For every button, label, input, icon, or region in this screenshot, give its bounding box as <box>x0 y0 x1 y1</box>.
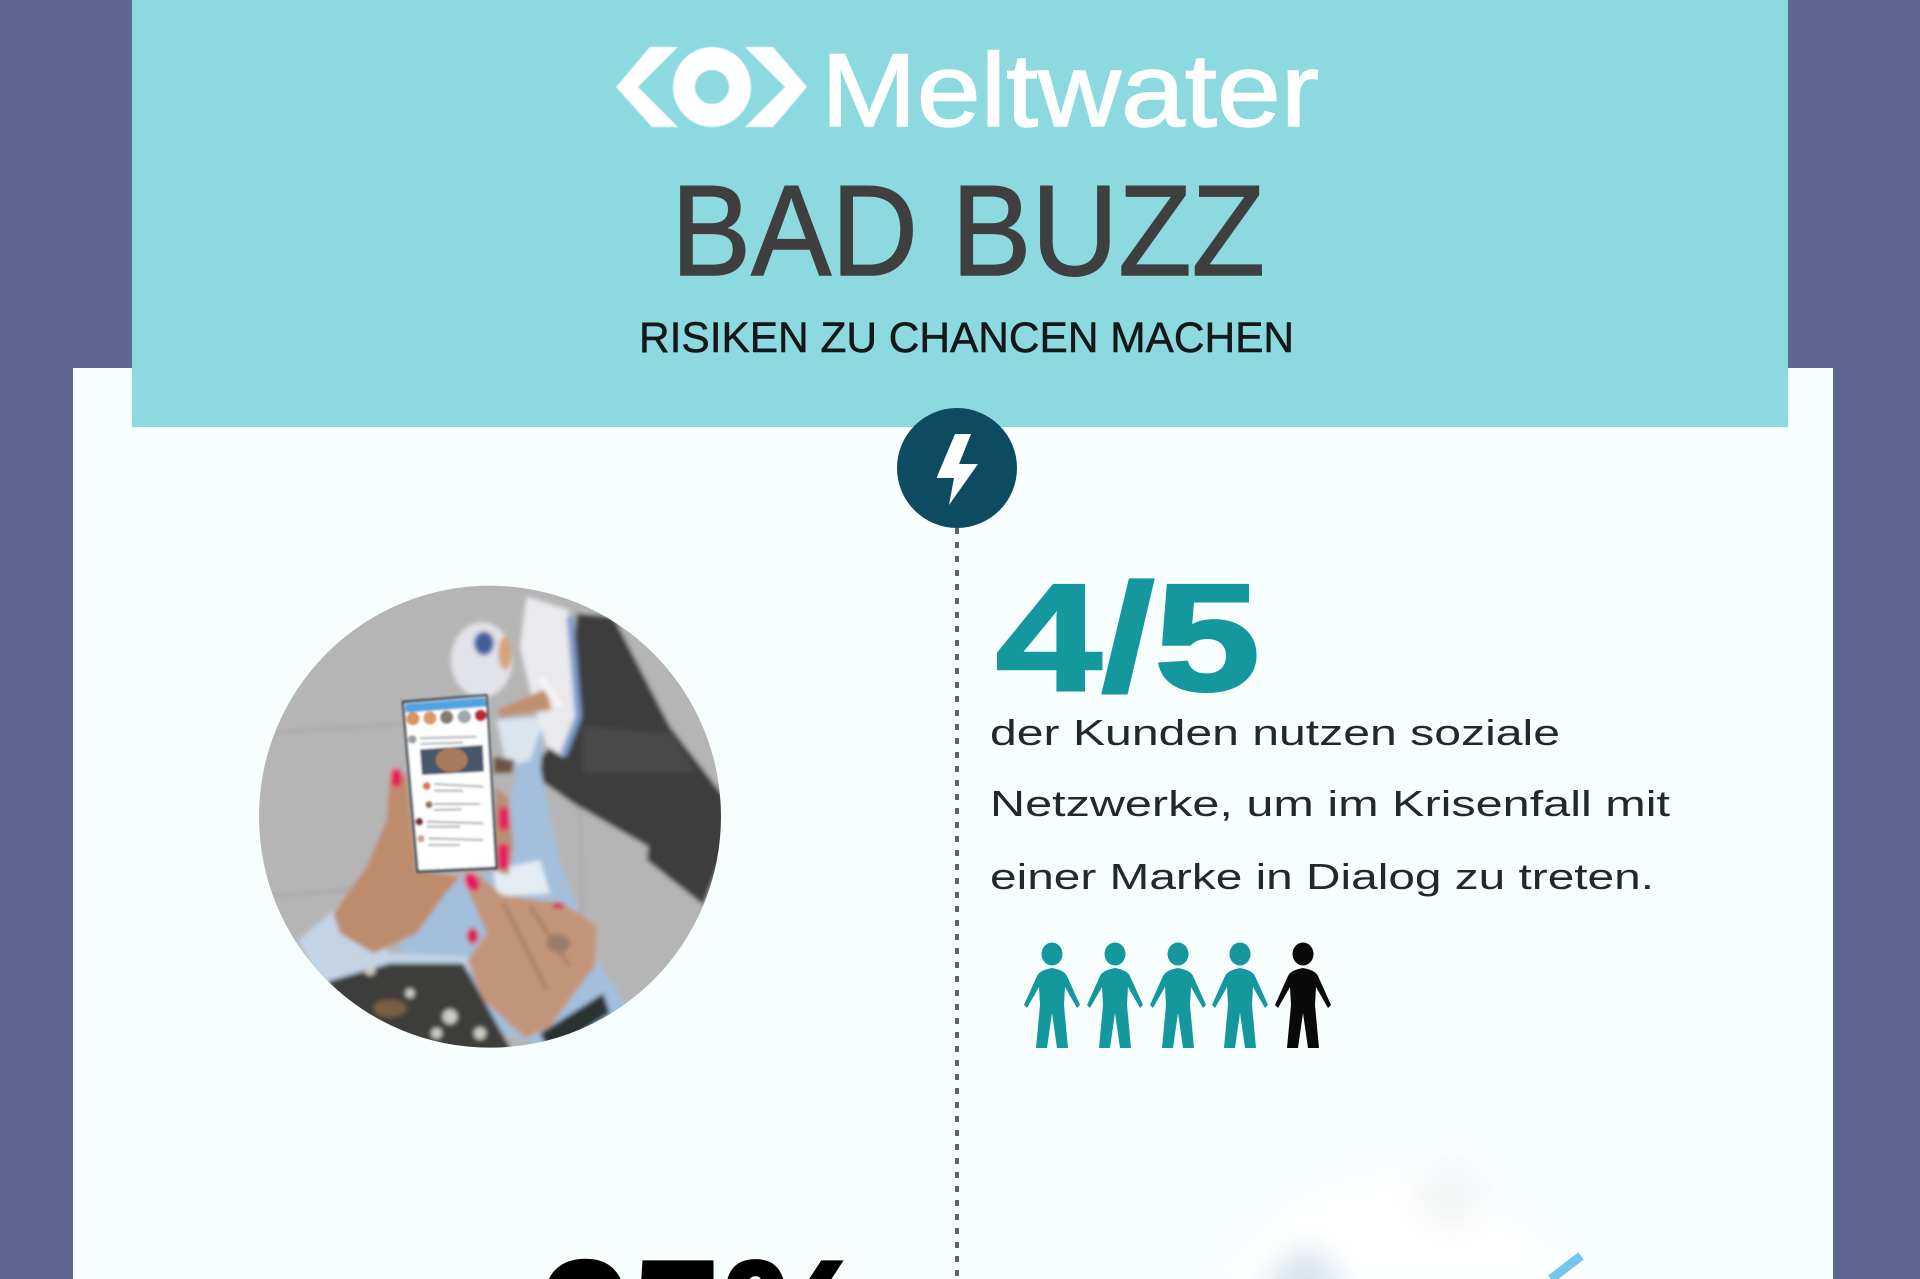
shadow on pavement <box>540 613 727 905</box>
icon: Meltwater eye mark <box>616 47 807 127</box>
panel: white content card <box>73 368 1833 1279</box>
title: BAD BUZZ <box>671 159 1265 303</box>
text block: 4/5 description <box>990 712 1670 897</box>
text block: 4/5 description: einer Marke in Dialog zu treten. <box>990 856 1654 897</box>
text block: 4/5 description: der Kunden nutzen soziale <box>990 712 1560 753</box>
fingers behind phone <box>493 757 515 773</box>
logo wordmark: Meltwater <box>821 33 1319 149</box>
left hand <box>333 773 460 953</box>
watch <box>538 992 612 1042</box>
shoes <box>451 623 512 697</box>
panel: header band <box>132 0 1788 427</box>
phone body <box>403 695 497 872</box>
stat: 4/5 number: 4/5 <box>996 553 1260 723</box>
photo: hands holding smartphone <box>250 577 733 1060</box>
icon: five people, four highlighted <box>1024 942 1331 1048</box>
icon: lightning bolt badge <box>897 408 1017 528</box>
logo: Meltwater <box>616 33 1319 149</box>
sleeve and patterned shirt <box>297 908 472 986</box>
text block: 4/5 description: Netzwerke, um im Krisenfall mit <box>990 783 1670 824</box>
jeans <box>506 730 563 872</box>
right hand <box>465 875 597 1038</box>
image: faint illustration at bottom right, cropped <box>1215 1163 1581 1279</box>
subtitle: RISIKEN ZU CHANCEN MACHEN <box>639 314 1294 362</box>
dotted vertical divider <box>955 528 959 1279</box>
